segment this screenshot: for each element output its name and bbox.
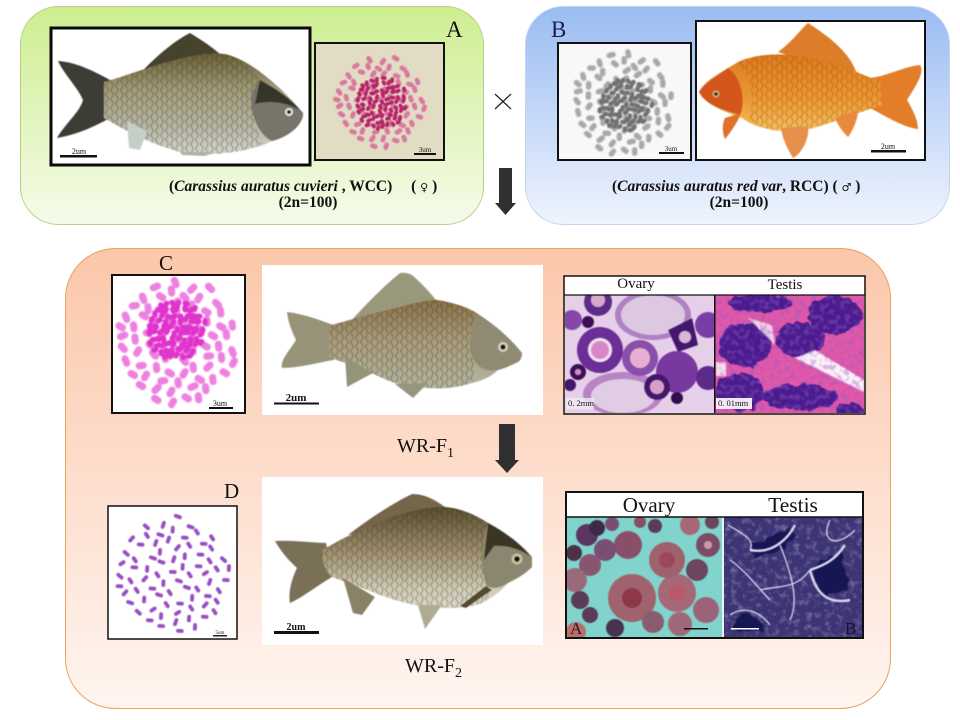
panel label C: C <box>159 251 173 275</box>
chromosome spread: WCC <box>315 43 444 160</box>
arrow: parents to offspring <box>495 168 516 215</box>
chromosome spread: WR-F1: 3um <box>213 399 228 408</box>
label: WR-F2: 2 <box>455 666 462 681</box>
scale bar <box>274 622 319 634</box>
chromosome spread: WR-F2: 5um <box>216 631 225 636</box>
scale bar: 2um <box>881 142 896 151</box>
fish photo: WR-F2 <box>262 477 543 645</box>
label: WR-F2: WR-F <box>405 655 455 677</box>
chromosome spread: WR-F1 <box>105 270 249 416</box>
heading: ovary: Ovary <box>617 276 655 292</box>
scale labels <box>566 398 752 409</box>
scale labels: A <box>570 619 583 638</box>
heading: testis: Testis <box>768 493 818 517</box>
scale bar <box>871 142 906 152</box>
histology: WR-F1 ovary and testis <box>562 276 865 416</box>
scale labels <box>570 619 856 638</box>
species caption: RCC: (2n=100) <box>710 194 768 211</box>
scale labels: 0. 01mm <box>718 398 749 408</box>
fish photo: RCC <box>696 21 925 160</box>
fish photo: WR-F1 <box>262 265 543 415</box>
species caption: RCC: (Carassius auratus red var, RCC) ( ♂ ) <box>612 178 860 195</box>
species caption: WCC: (Carassius auratus cuvieri , WCC) ( ♀ ) <box>169 178 437 195</box>
scale bar: 2um <box>286 392 306 404</box>
scale bar: 2um <box>72 147 87 156</box>
panel A: female parent WCC <box>20 6 484 224</box>
label: WR-F1: WR-F <box>397 435 447 457</box>
chromosome spread: RCC: 3um <box>665 145 678 153</box>
heading: ovary: Ovary <box>623 493 676 517</box>
fish photo: WCC <box>51 28 310 165</box>
scale bar <box>274 392 319 404</box>
scale bar: 2um <box>287 622 306 633</box>
species caption: RCC <box>612 178 860 211</box>
chromosome spread: WCC: 3um <box>419 146 432 154</box>
scale labels: B <box>845 619 856 638</box>
species caption: WCC: (2n=100) <box>279 194 337 211</box>
heading: testis: Testis <box>768 277 803 293</box>
panel B: male parent RCC <box>526 6 950 224</box>
panel label B: B <box>551 17 566 42</box>
arrow: F1 to F2 <box>495 424 519 473</box>
cross symbol <box>495 94 511 109</box>
chromosome spread: RCC <box>558 38 691 169</box>
panel label D: D <box>224 479 239 503</box>
scale labels: 0. 2mm <box>568 398 594 408</box>
label: WR-F1: 1 <box>447 446 454 461</box>
scale bar <box>60 147 97 158</box>
histology: WR-F2 ovary and testis <box>563 492 863 642</box>
panel label A: A <box>446 17 463 42</box>
panel: offspring generations <box>66 248 890 708</box>
species caption: WCC <box>169 178 437 211</box>
chromosome spread: WR-F2 <box>104 506 242 645</box>
